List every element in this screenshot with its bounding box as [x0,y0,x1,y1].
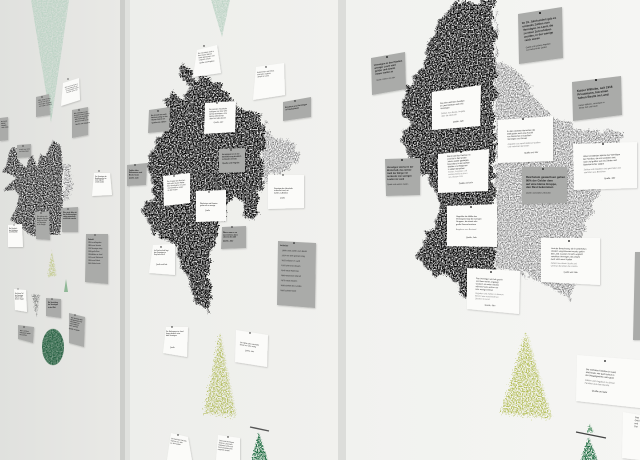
white card: Bericht aus verschiedenen [475,294,499,299]
card: Quelle und Angabe [222,161,240,165]
card: und weiter vermehrt [39,103,53,108]
grey card: Vermögen in den Händen [374,59,403,67]
card: Die Anzahl der sehr [151,113,167,117]
card [204,101,236,134]
card: in der Welt [48,306,56,309]
card: Die Zahl der Reichen [171,437,187,443]
green funnel at top [31,0,69,123]
card: Zahlen über [129,170,139,172]
grey card: Privatmann, hat einen [577,89,609,97]
white card: Ungefähr die Hälfte des [456,215,477,218]
card [221,226,246,249]
card: aber fast alles davon [209,116,226,120]
card [253,63,285,100]
card: zu Jahr weiter [170,441,181,446]
card at lower edge: Das [635,417,640,419]
card: Im Land [1,120,7,123]
card: und Einkünfte [9,231,18,234]
grey card: reich waren [524,36,541,42]
card [72,107,91,138]
white card: Quelle und Jahr [524,152,539,155]
grey card: Wirtschaft, das meiste [387,169,412,172]
white card: wodurch es weiter wächst, [476,282,500,287]
card: Wachstum und Gewinn [200,202,217,205]
card: timeline [277,241,316,308]
card: in diesem Land, mit [274,189,289,192]
grey card: Leuten im Land [387,178,405,181]
grey card: auf eine kleine Gruppe, [526,182,557,186]
white card: Gruppen, die damit sehr [456,220,478,223]
card: list: 1970 mehr Wohlstand [88,256,103,259]
grey card: den Rest bekommen [526,185,554,189]
card: Quelle [205,210,210,212]
bar [250,427,269,431]
white card: besonders in den großen [447,162,470,166]
card [61,78,80,106]
grey card: zu einer Zeit erhoben [523,27,552,35]
white card: Die zehn reichsten Familien [440,99,465,105]
white card: aus diesem Jahr [448,176,463,179]
card: sind im Land nach [219,442,232,446]
card: list: 1950 Aufbau im Land [88,253,102,256]
white card: im Land besitzen sehr viel [440,102,464,108]
white card: große Firmen besitzen [456,223,476,226]
white card: Welt gehört auch eine Anzahl [507,131,534,136]
white card: Das Vermögen wird oft geerbt [476,277,503,281]
white card: Angaben aus verschiedenen Quellen [508,141,540,146]
grey card: wurden, in der wenige [523,30,554,39]
card at lower edge: und [634,423,639,425]
grey card [518,7,563,64]
white card: Quelle, Jahr [453,120,464,124]
card: Ein kleiner Teil [15,293,24,295]
white card: noch viel größer sein als Zahlen und [583,159,618,164]
grey card: dieser Zeit und heute [579,104,599,110]
card [14,288,27,312]
card: liegen deutlich unter [166,332,181,335]
white card [432,85,481,130]
white card: und dann weiter angelegt, [476,280,499,284]
card: der Vermögen [48,303,58,306]
card: verteilt im Land [257,74,269,78]
white card: Vermögens liegt bei wenigen [456,218,482,221]
tiny green tree [64,279,68,292]
card: list [85,234,108,284]
card: Quelle und Jahr [156,264,168,266]
card: letzten Jahren an [151,117,165,121]
white card: Städten und Regionen [448,164,468,168]
card: Bevölkerung ist im [95,177,107,180]
card: Über Jahre hinweg [38,97,51,102]
card: timeline: 1990 Einheit des Landes [281,284,302,288]
card: Reichen stieg in den [151,115,168,119]
card: timeline: 1948 Neue Währung [281,269,299,273]
card: Quelle, Jahr [214,121,224,124]
white card: sehr wenig besitzen [475,288,493,292]
card [163,326,188,357]
card: Die meisten Haushalte [209,107,227,111]
card: Quelle, Angabe [69,327,80,332]
card: Besitz heute [129,173,139,176]
white card: Angaben zum Bestand [456,228,476,231]
card: timeline: Zeitleiste [280,244,288,247]
grey card: erstmals Zahlen zum [522,20,551,28]
light grey map area [62,160,73,205]
card: damals [1,125,7,127]
dark noise map [142,62,262,313]
card [69,313,85,347]
card: ungleich verteilt [199,57,211,62]
green funnel at top [211,0,230,37]
panel: middle wall section [127,0,346,460]
card: list: 1880 neue Gesetze [88,244,101,247]
card: die Haushalte verteilt [65,86,79,92]
grey card: immer weiter zu [375,70,394,76]
card: Vermögen im [70,320,80,325]
white card: Jahren weiter gestiegen, [447,159,470,163]
card: des Vermögens im Land [167,183,186,187]
card: der Vermögen [15,295,23,297]
white card: weitere Berichte dazu [448,172,468,176]
card: sehr viele [1,125,9,129]
grey card: Vermögen wächst in der [387,166,414,169]
grey card: Vermögen im Land, die [523,23,554,32]
grey card at edge [633,252,640,340]
card: bekommt mehr [20,331,31,335]
card: stimmt die Zahl [223,236,237,239]
card: Quelle [280,197,285,199]
olive tree [205,333,237,416]
card: Quelle, Jahr [245,349,255,353]
white card: Zahlen und Angaben zu diesen [585,379,616,385]
white card: Zahlen und Angaben sind geschätzt und [584,166,622,171]
card: Vermögen angelegt [38,101,52,106]
white card: Zahlen, Angaben und [448,169,467,174]
card: ausrechnet, dann [223,233,238,236]
card: timeline: 1975 Neue Steuern [281,279,297,283]
grey card: Quelle und Zahlen, Berichte [526,192,552,195]
card: Die Hälfte aller Haushalte [240,341,259,347]
grey card: Kaiser Wilhelm, seit 1918 [577,85,613,93]
white card: sind heute, wie auch schon in [586,371,615,377]
white card: Laut der Berechnung, die in zahlreichen [551,247,586,251]
card: Die Gruppe der Reichen [167,179,185,183]
card: Quelle [170,347,175,349]
card [92,170,112,196]
card: das Geldvermögen [63,213,77,216]
white card: während viele andere nur [476,286,499,289]
white card [498,116,553,163]
white card: auch viele neue Studien [551,258,572,261]
white card: Quelle, Jahr [604,177,616,180]
card: Regionen und auch [218,444,233,448]
white card: Quelle, Jahr [485,305,496,307]
grey card [522,167,567,204]
card: hält mehr als die Hälfte [167,181,185,185]
card [8,224,23,247]
light grey map area [262,120,299,190]
small olive tree [48,250,57,277]
white card: der Vergangenheit, sehr groß [585,374,615,380]
grey card: größer und nimmt [375,67,395,73]
card: das Vermögen je [154,252,166,254]
card [0,117,9,141]
grey card: Quelle, Zahlen und Jahr [376,77,396,82]
card: Reichtum und Vermögen [285,103,308,109]
grey card: Im 19. Jahrhundert gab es [522,16,557,25]
card: und wer davon hat [66,88,78,94]
grey card [385,158,420,196]
card: und Vermögen [37,222,46,224]
white card: Familien aus dem Bericht [584,382,610,387]
card: list: 2000 Zahlen heute [88,262,101,265]
card: stetig gewachsen [63,215,76,218]
card: timeline: 1960 Wachstum überall [281,274,301,278]
card: nach Gruppen sehr [218,446,233,451]
grey card: 80% der Gelder dem [526,178,553,182]
card: ganzen Land heute [75,118,89,123]
white card: Berichte bisher zeigen [583,162,605,166]
white card [438,149,489,193]
white card: Angaben und Zahlen zu diesem [475,292,504,296]
white card: der Familien, die am reichsten sind, [583,156,616,161]
card: der Bevölkerung auf [65,85,78,91]
card: als andere [19,333,27,337]
white card: über die Herkunft [441,113,457,118]
white card: das Land zu jenen mit sehr ungleich [551,252,583,256]
panel: left wall section [0,0,130,460]
card: list: 1850 erste Angaben [88,241,102,244]
card: Quelle und Angaben [199,59,215,64]
white card: weiteren Berichten der Länder [551,264,578,268]
card [283,97,311,121]
card: Anteil am Vermögen [74,114,89,119]
card [196,190,226,222]
card: timeline: 1900 Erste Zahlen zum Besitz [282,249,307,253]
card: Einkommen und Besitz [257,69,274,74]
grey card: weniger Leute wird [374,64,397,70]
card: Einkommen und [129,172,142,174]
white card [467,268,520,314]
card: kleine Zahl besitzt [209,114,224,118]
card: Wenn man es so [223,232,238,234]
white card: Land ist in den letzten [447,156,467,161]
card at lower edge: Geld [635,420,640,423]
card: sehr schnell [69,324,79,329]
card at lower edge [622,412,640,460]
card: timeline: 1923 Inflation im Land [281,259,300,263]
card: wurde viel Geld in [38,99,50,104]
card: Die Summe aller [71,316,83,321]
card [36,94,53,117]
card: Quelle, Jahr [223,241,234,243]
card: lebten [1,122,6,125]
white card: Unter Umständen könnte das Vermögen [583,153,621,158]
card: Vermögen der Haushalte [274,187,293,190]
card: wächst von Jahr [170,439,183,444]
white card: Quelle und Jahr [592,389,608,394]
card: Land wächst [70,322,80,327]
white card: Vermögen und Firmen [507,138,527,141]
card: gehen oft an wenige [200,204,215,207]
card: in Deutschland [285,106,300,111]
card: Anteile am Geld [19,147,30,151]
card: schlecht verteilt [222,157,237,161]
white card: Ländern vorgenommen wurde, gehört [551,250,585,253]
card: sind sehr ungleich [257,72,271,76]
card [193,45,221,77]
card: und vererbt es weiter [167,185,184,190]
card: Die Verteilung [48,301,58,304]
white card: Zahlen zum Besitz, Angabe [441,110,466,115]
card [163,173,190,206]
card [219,148,245,173]
card: verteilt worden [95,180,104,183]
white card [447,204,497,247]
card [18,325,34,343]
white card: Zahlen aus dieser Studie und [551,262,577,265]
green oval [42,328,64,366]
white card: Quellen im Land [475,298,490,301]
white card: stammen aus Berichten [584,170,607,174]
white card: Quelle und Jahr [459,182,473,185]
olive tree [502,332,553,418]
card: stark gewachsen und [198,54,215,59]
white card: Zu den reichsten Menschen der [507,129,535,133]
card: dem Vermögen [166,335,177,337]
card [127,163,147,186]
white card: und mehreren Berichten [508,144,529,148]
card: Das Vermögen der [95,176,107,178]
card at lower edge: Gut [634,425,638,428]
card: Land ungleich [95,180,104,182]
card: Quelle, Jahr [129,177,139,179]
green tree [252,432,268,460]
grey card: Quelle und weitere Zahlen [387,183,408,186]
white card: Die Anzahl der Reichen im [447,153,471,158]
grey scatter form [32,294,40,317]
green tree [581,437,598,460]
card: und wurde vererbt [63,217,77,220]
card: list: 1930 große Krise [88,250,100,253]
card: Geld und Vermögen [219,439,234,444]
bar [576,432,606,438]
card: Im Durchschnitt liegt [154,249,169,252]
card: in der Gruppe [37,224,46,226]
white card: Vermögen [440,107,450,110]
card: list: Zeittafel [88,238,94,241]
card [216,435,240,460]
white card: Die reichsten Familien im Land [586,368,617,374]
card: Vermögen ist in der [222,152,240,156]
card: Wie sich Vermögen in [65,83,78,89]
card: Quelle und Zahlen [152,121,166,124]
card [235,330,268,367]
white card: in vielen Bereichen [448,168,465,171]
card: besitzt nur sehr wenig [240,343,256,348]
card [46,298,61,318]
grey card: im Besitz von wenigen [387,175,412,178]
card [61,207,78,232]
card: und Vermögen [19,149,29,153]
card: Die reichsten Leute [74,110,88,115]
card [148,107,170,133]
card: Über viele Jahre ist [63,211,77,214]
white card [541,238,600,285]
grey card: zur Herkunft der Zahlen [526,46,547,52]
card [167,433,192,460]
card: Bevölkerung deutlich [222,155,242,158]
card [149,244,175,275]
white card: verteiltem Vermögen, das zeigen [551,255,580,259]
white card [576,355,640,408]
card: ungleich verteilt [218,448,230,452]
grey card: Reichstum gewachsen gehen [526,175,565,179]
card: den letzten Jahren [198,52,212,57]
card [35,211,50,240]
card: Hier stehen viele [37,215,48,218]
white card [573,142,637,190]
card: Angaben über den [37,217,49,220]
card: besitzen einen hohen [74,112,90,117]
light grey map area [494,0,622,300]
card: Die Einkommen im Land [166,331,183,333]
white card: von Deutschen mit großem [507,134,532,138]
small green marker [587,424,594,432]
grey card [371,52,406,95]
card: Zahlen zu Anteilen [274,191,288,194]
grey card: Quelle und weitere Angaben [526,42,551,49]
white card: Quelle, Jahr [466,237,477,239]
grey card: Geld der Bürger ist [387,172,408,175]
grey card: hohen Besitz im Land [578,92,609,100]
dark noise map [400,0,494,298]
card: timeline: 2005 Zahlen heute [280,289,296,293]
card: wenig Vermögen, eine [209,113,227,116]
card: list: 1910 Vermögen stieg [88,247,102,250]
card: liegt bei einer [15,296,23,299]
card: timeline: 1933 Die Krise danach [281,264,300,268]
white card: Quelle und Jahr [564,272,578,274]
card: Wer viel hat, [20,329,30,333]
card: list: 1990 neue Einheit [88,259,101,262]
card: an die Kinder [167,188,178,192]
panel: right wall section [346,0,640,460]
grey card: Kaiser Wilhelm, Vermögen zu [579,102,605,107]
card: der Vermögen [9,230,18,232]
card: Besitz von Geld [37,219,47,222]
card: timeline: 1914 Vor dem großen Krieg [282,254,305,258]
card [268,174,304,209]
card [17,144,31,158]
card: Kopf sehr hoch [154,254,165,256]
card: kleinen Gruppe [15,298,24,300]
card: Ein Vergleich [9,228,17,230]
card: Die Vermögen sind in [198,50,214,55]
card: aller Haushalte im [75,116,88,121]
grey card [572,76,622,121]
dark noise map [2,140,62,236]
card: Quelle und Angaben [75,121,90,126]
card: verfügen nur über sehr [209,110,228,113]
card: Einkommen und [70,319,82,323]
